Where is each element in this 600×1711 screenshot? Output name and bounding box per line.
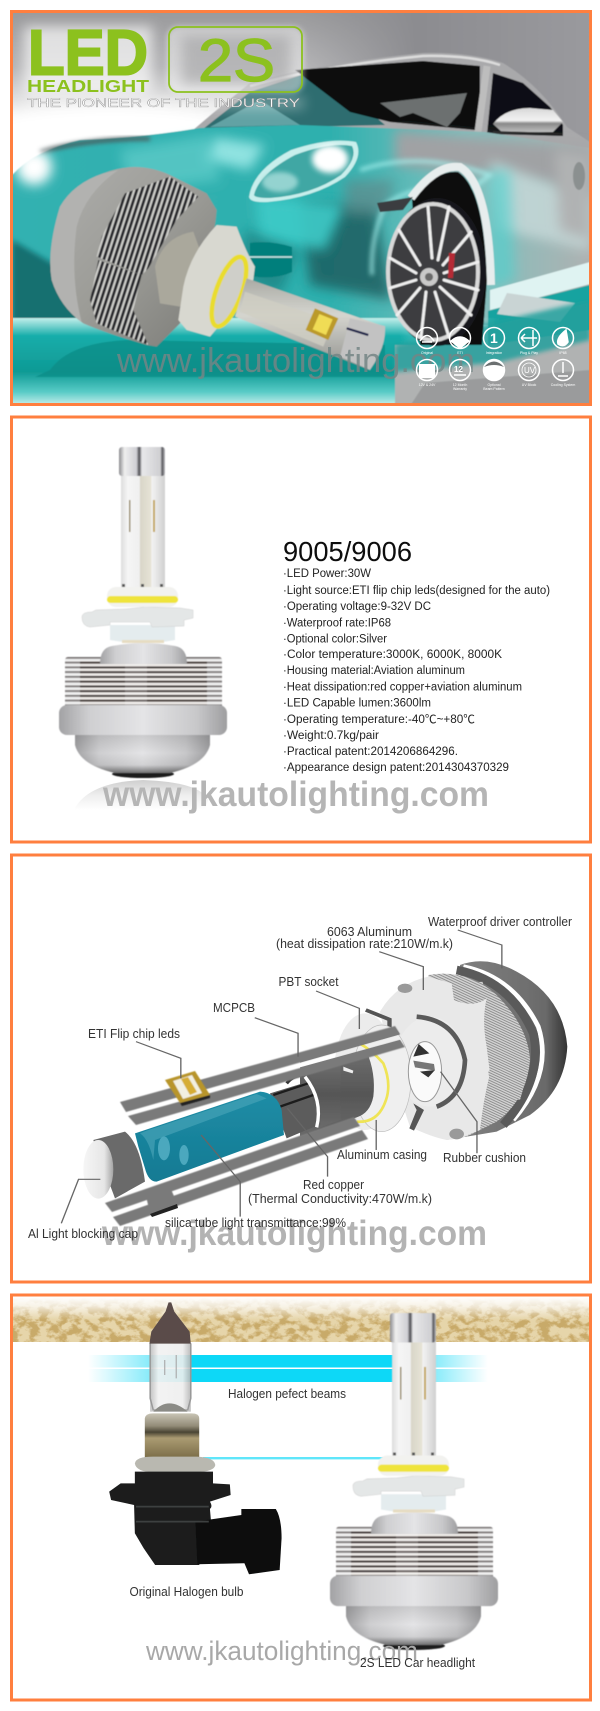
specification list: ·Operating temperature:-40℃~+80℃ [283,714,476,726]
HEADLIGHT wordmark: HEADLIGHT [27,76,149,96]
icon captions: Warranty [453,387,467,391]
callout labels: Rubber cushion [443,1151,526,1165]
icon: warranty [450,360,470,380]
specification list: ·LED Power:30W [283,568,371,580]
callout labels: (heat dissipation rate:210W/m.k) [276,937,453,951]
specification list: ·Housing material:Aviation aluminum [283,665,465,677]
icon captions: Optional [487,383,501,387]
feature icons [416,328,574,380]
specification list: ·Weight:0.7kg/pair [283,730,379,742]
icon: voltage [416,360,438,380]
specification list: ·Practical patent:2014206864296. [283,746,458,758]
panel: exploded diagram [12,855,590,1282]
light beams [88,1355,488,1459]
icon captions: Beam Pattern [483,387,505,391]
callout labels: MCPCB [213,1001,255,1015]
LED caption: 2S LED Car headlight [360,1656,475,1670]
heat sink fins [428,974,530,1140]
callout labels: Aluminum casing [337,1148,427,1162]
hero background and car artwork [0,10,592,408]
panel: product specifications [12,417,590,842]
PBT socket [334,1008,424,1132]
LED logo wordmark: LED [28,16,148,88]
halogen caption: Original Halogen bulb [130,1585,244,1599]
icon: warranty: 12 [454,365,463,374]
specification list: ·Optional color:Silver [283,634,387,646]
car roof and cabin [194,52,589,148]
icon: original fit [416,328,438,348]
upper strip ends [300,1027,403,1076]
icon: ETI [450,328,470,348]
LED chip [165,1071,210,1106]
icon captions [419,351,575,391]
watermark: www.jkautolighting.com [145,1636,418,1666]
red copper [270,1082,318,1138]
icon captions: Cooling System [551,383,575,387]
specification list: ·Heat dissipation:red copper+aviation aluminum [283,682,522,694]
specification list: ·Light source:ETI flip chip leds(designed for the auto) [283,585,550,597]
silica tube [135,1092,284,1182]
callout labels: ETI Flip chip leds [88,1027,180,1041]
tagline: THE PIONEER OF THE INDUSTRY [27,98,300,110]
2S badge [169,27,302,94]
front headlight [249,141,358,202]
model number heading: 9005/9006 [283,536,412,567]
callout labels: Waterproof driver controller [428,915,572,929]
callout labels: (Thermal Conductivity:470W/m.k) [248,1192,432,1206]
callout labels: 6063 Aluminum [327,925,412,939]
center hole [408,1042,442,1102]
specification list: ·Waterproof rate:IP68 [283,618,391,630]
end cap [93,1132,145,1198]
icon: UV block [518,360,540,380]
rear assembly illustration [300,961,567,1140]
callout labels: silica tube light transmittance:99% [165,1216,346,1230]
watermark: www.jkautolighting.com [101,1214,487,1253]
icon captions: Integration [486,351,502,355]
icon captions: Plug & Play [520,351,538,355]
car body teal paint [12,125,590,325]
callout labels: Al Light blocking cap [28,1227,138,1241]
aluminum casing [300,1052,374,1137]
icon: beam pattern [484,360,504,380]
LED bulb photo [59,447,227,778]
watermark: www.jkautolighting.com [102,775,489,814]
specification list: ·Appearance design patent:2014304370329 [283,762,509,774]
specification list: ·LED Capable lumen:3600lm [283,698,431,710]
callout labels: Red copper [303,1178,364,1192]
icon captions: Original [421,351,433,355]
bulb reflection [75,780,208,810]
icon captions: 12V & 24V [419,383,436,387]
icon: cooling system [552,360,574,380]
halogen bulb photo [109,1302,282,1574]
callout labels: PBT socket [278,975,339,989]
front assembly illustration [83,1062,341,1199]
beam caption: Halogen pefect beams [228,1387,346,1401]
leader lines [61,930,502,1223]
driver controller housing [460,961,567,1137]
2S badge: 2S [198,27,275,94]
logo halo [22,26,304,109]
icon captions: ETI [457,351,463,355]
callout labels [28,915,572,1241]
specification list [283,568,550,774]
icon: UV block: UV [524,366,536,375]
icon captions: 12 Month [453,383,467,387]
icon: IP68 [552,328,574,348]
lower sill and floor [0,262,590,408]
specification list: ·Operating voltage:9-32V DC [283,601,431,613]
MCPCB strips [105,1026,405,1226]
LED bulb photo [330,1313,498,1650]
icon captions: UV Block [522,383,536,387]
LED bulb product photo [50,167,385,370]
panel: hero car banner [0,10,592,408]
watermark: www.jkautolighting.com [116,342,475,380]
icon: integration: 1 [490,330,498,346]
icon captions: IP68 [559,351,567,355]
specification list: ·Color temperature:3000K, 6000K, 8000K [283,649,502,661]
panel: halogen vs LED comparison [12,1295,590,1700]
front flange [380,977,490,1140]
sand band [13,1297,589,1342]
icon: plug and play [518,328,540,348]
icon: integration [484,328,504,348]
rear wheel [377,167,491,346]
